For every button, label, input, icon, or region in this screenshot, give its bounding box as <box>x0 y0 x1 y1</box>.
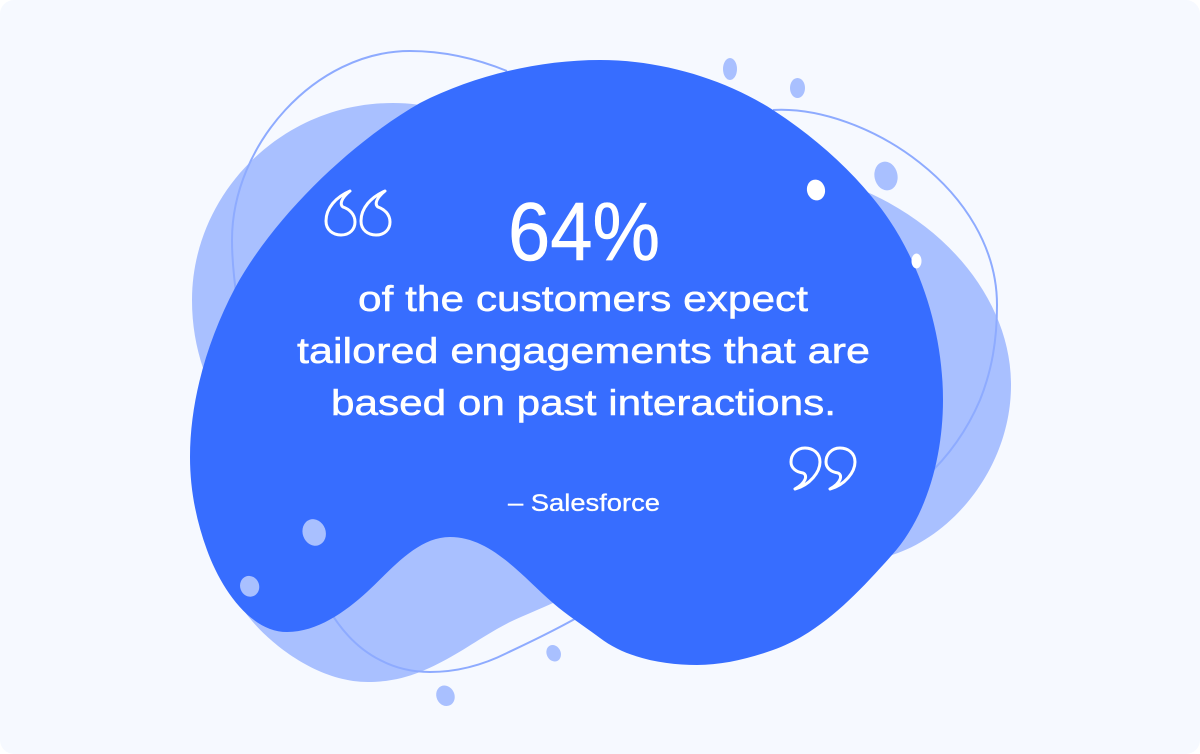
icon: closing quotation mark <box>791 448 855 489</box>
quote text <box>297 278 870 423</box>
icon: opening quotation mark <box>326 191 390 235</box>
light blob: upper left <box>192 103 440 368</box>
quote text: of the customers expect <box>358 278 808 319</box>
decorative dots <box>237 58 922 709</box>
light blob: right <box>800 187 1011 555</box>
outline: bottom <box>328 608 580 672</box>
outline: right <box>773 110 997 478</box>
quote text: based on past interactions. <box>331 382 836 423</box>
quote text: tailored engagements that are <box>297 330 870 371</box>
light blob: bottom <box>245 500 553 682</box>
source attribution: – Salesforce <box>508 490 660 517</box>
headline statistic: 64% <box>508 185 660 278</box>
outline: upper left <box>232 51 507 300</box>
main blue blob <box>190 60 943 665</box>
